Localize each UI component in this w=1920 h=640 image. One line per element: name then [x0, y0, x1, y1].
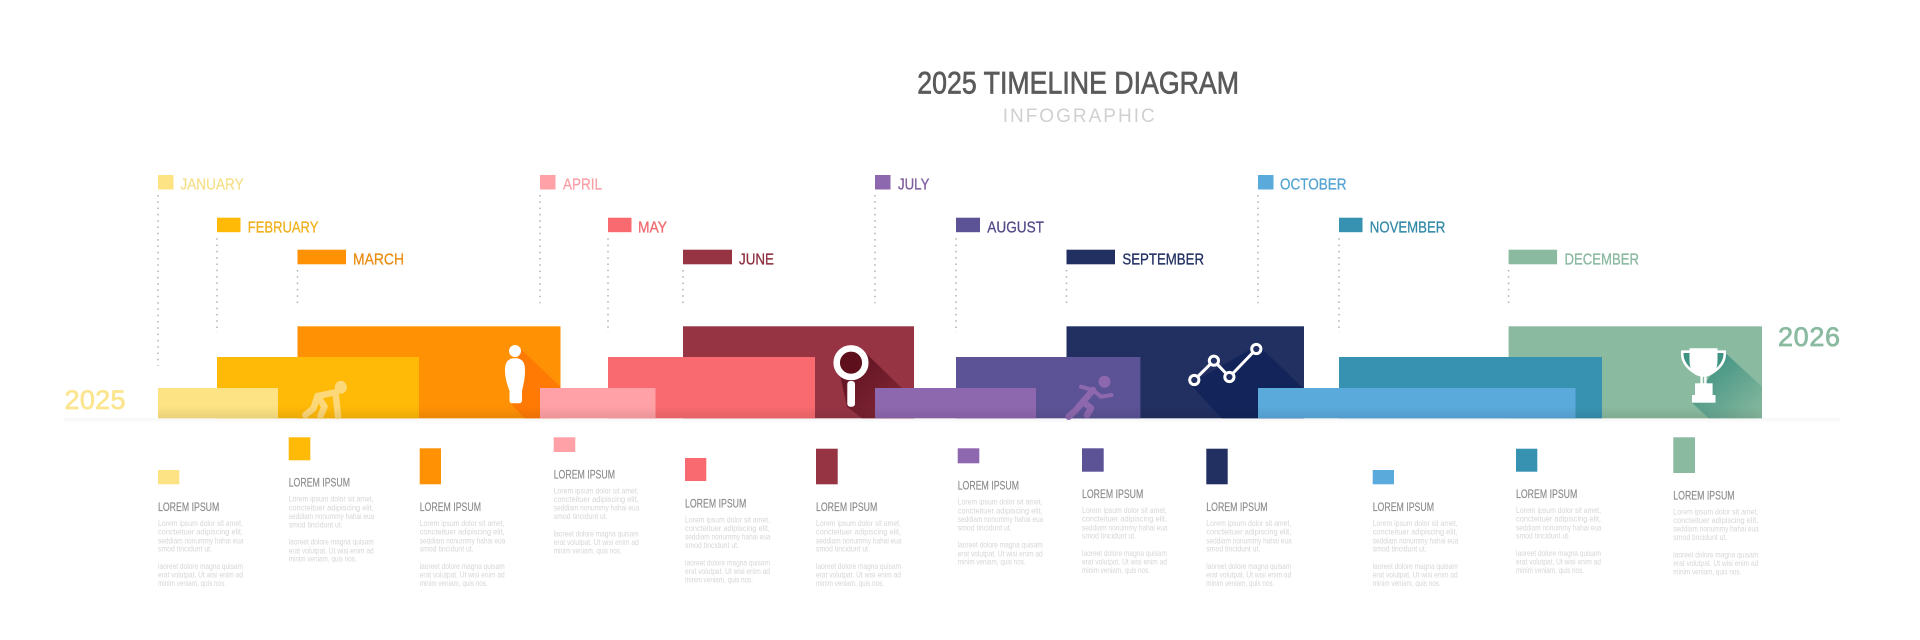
note: March: LOREM IPSUM: [420, 502, 481, 514]
note: December: concteituer adipiscing elit,: [1673, 515, 1758, 525]
note: July: [958, 448, 1043, 567]
note: August: [1082, 448, 1168, 575]
note: March: seddiam nonummy hahai eua: [420, 535, 505, 545]
note: June: Lorem ipsum dolor sit amet,: [816, 518, 901, 528]
icon: crawling figure: [305, 381, 347, 416]
note: July: minim veniam, quis nos.: [958, 557, 1026, 567]
note: August: seddiam nonummy hahai eua: [1082, 522, 1168, 532]
note: June: seddiam nonummy hahai eua: [816, 535, 902, 545]
bar: April: [540, 388, 656, 418]
icon: trophy: [1682, 348, 1725, 403]
bar: September with line-chart icon: [1066, 326, 1304, 418]
note: October: LOREM IPSUM: [1373, 502, 1434, 514]
note: August: concteituer adipiscing elit,: [1082, 514, 1167, 524]
note: April: seddiam nonummy hahai eua: [554, 503, 639, 513]
note: August: Lorem ipsum dolor sit amet,: [1082, 505, 1167, 515]
note: March: [420, 448, 505, 588]
note: May: concteituer adipiscing elit,: [685, 523, 770, 533]
note: September: LOREM IPSUM: [1206, 502, 1268, 514]
note: May: LOREM IPSUM: [685, 498, 746, 510]
month flag: April: [540, 175, 602, 303]
month flag: May: MAY: [638, 220, 667, 236]
note: May: smod tincidunt ut.: [685, 540, 739, 550]
bar: March with person icon: [298, 326, 560, 418]
note: December: [1673, 437, 1759, 576]
note: July: laoreet dolore magna quisam: [958, 540, 1043, 550]
note: April: erat volutpat. Ut wisi enim ad: [554, 537, 639, 547]
note: October: concteituer adipiscing elit,: [1373, 527, 1458, 537]
note: November: smod tincidunt ut.: [1516, 531, 1570, 541]
note: June: minim veniam, quis nos.: [816, 578, 884, 588]
note: July: Lorem ipsum dolor sit amet,: [958, 497, 1043, 507]
month flag: June: JUNE: [739, 252, 774, 268]
note: April: Lorem ipsum dolor sit amet,: [554, 485, 639, 495]
note: October: minim veniam, quis nos.: [1373, 578, 1441, 588]
note: December: smod tincidunt ut.: [1673, 532, 1727, 542]
month flag: February: [217, 218, 319, 333]
note: February: LOREM IPSUM: [289, 478, 350, 490]
note: September: minim veniam, quis nos.: [1206, 578, 1274, 588]
note: September: Lorem ipsum dolor sit amet,: [1206, 518, 1291, 528]
bar: July: [875, 388, 1036, 418]
month flag: July: [875, 175, 930, 303]
note: February: seddiam nonummy hahai eua: [289, 511, 374, 521]
month flag: April: APRIL: [563, 176, 602, 194]
note: September: smod tincidunt ut.: [1206, 544, 1260, 554]
note: August: laoreet dolore magna quisam: [1082, 548, 1167, 558]
note: May: seddiam nonummy hahai eua: [685, 532, 771, 542]
note: October: laoreet dolore magna quisam: [1373, 561, 1458, 571]
note: June: erat volutpat. Ut wisi enim ad: [816, 570, 901, 580]
note: December: laoreet dolore magna quisam: [1673, 549, 1758, 559]
note: November: erat volutpat. Ut wisi enim ad: [1516, 557, 1601, 567]
note: December: seddiam nonummy hahai eua: [1673, 524, 1759, 534]
note: June: concteituer adipiscing elit,: [816, 527, 901, 537]
note: December: erat volutpat. Ut wisi enim ad: [1673, 558, 1759, 568]
icon: line chart: [1190, 344, 1261, 385]
note: October: smod tincidunt ut.: [1373, 544, 1427, 554]
note: March: laoreet dolore magna quisam: [420, 561, 505, 571]
note: June: laoreet dolore magna quisam: [816, 561, 901, 571]
icon: running figure: [1069, 376, 1112, 417]
note: May: minim veniam, quis nos.: [685, 574, 753, 584]
note: January: seddiam nonummy hahai eua: [158, 535, 244, 545]
note: November: seddiam nonummy hahai eua: [1516, 522, 1602, 532]
month flag: August: AUGUST: [987, 220, 1044, 236]
icon: standing person: [505, 345, 525, 403]
note: February: erat volutpat. Ut wisi enim ad: [289, 545, 374, 555]
note: March: concteituer adipiscing elit,: [420, 527, 505, 537]
month flag: September: SEPTEMBER: [1122, 252, 1204, 268]
month flag: October: OCTOBER: [1280, 176, 1346, 194]
note: November: Lorem ipsum dolor sit amet,: [1516, 505, 1601, 515]
note: October: [1373, 470, 1458, 588]
month flag: November: NOVEMBER: [1370, 220, 1445, 236]
month flag: December: [1509, 250, 1639, 303]
note: May: erat volutpat. Ut wisi enim ad: [685, 566, 770, 576]
month flag: December: DECEMBER: [1564, 252, 1639, 268]
note: July: LOREM IPSUM: [958, 481, 1019, 493]
bar: October: [1258, 388, 1576, 418]
note: June: LOREM IPSUM: [816, 502, 877, 514]
note: April: minim veniam, quis nos.: [554, 545, 622, 555]
month flag: March: [298, 250, 404, 303]
note: February: concteituer adipiscing elit,: [289, 502, 374, 512]
note: February: minim veniam, quis nos.: [289, 554, 357, 564]
note: October: Lorem ipsum dolor sit amet,: [1373, 518, 1458, 528]
note: January: erat volutpat. Ut wisi enim ad: [158, 570, 243, 580]
month flag: August: [956, 218, 1044, 333]
month flag: October: [1258, 175, 1346, 303]
month flag: September: [1066, 250, 1204, 303]
note: January: LOREM IPSUM: [158, 502, 219, 514]
note: January: minim veniam, quis nos.: [158, 578, 226, 588]
note: October: erat volutpat. Ut wisi enim ad: [1373, 570, 1458, 580]
month flag: May: [608, 218, 667, 333]
note: June: [816, 449, 902, 588]
note: November: laoreet dolore magna quisam: [1516, 548, 1601, 558]
note: November: LOREM IPSUM: [1516, 489, 1577, 501]
note: September: seddiam nonummy hahai eua: [1206, 535, 1292, 545]
note: March: erat volutpat. Ut wisi enim ad: [420, 570, 505, 580]
note: March: smod tincidunt ut.: [420, 544, 474, 554]
note: July: seddiam nonummy hahai eua: [958, 514, 1043, 524]
note: April: laoreet dolore magna quisam: [554, 528, 639, 538]
month flag: July: JULY: [898, 176, 930, 194]
bar: December with trophy: [1509, 326, 1762, 418]
note: December: LOREM IPSUM: [1673, 490, 1735, 502]
note: June: smod tincidunt ut.: [816, 544, 870, 554]
bar: January: [158, 388, 278, 418]
note: September: concteituer adipiscing elit,: [1206, 527, 1291, 537]
note: August: erat volutpat. Ut wisi enim ad: [1082, 557, 1167, 567]
note: February: smod tincidunt ut.: [289, 519, 343, 529]
note: November: concteituer adipiscing elit,: [1516, 514, 1601, 524]
note: September: laoreet dolore magna quisam: [1206, 561, 1291, 571]
note: January: smod tincidunt ut.: [158, 544, 212, 554]
bar: June with magnifier: [683, 326, 914, 418]
note: January: concteituer adipiscing elit,: [158, 527, 243, 537]
bar: May: [608, 357, 815, 418]
subtitle: INFOGRAPHIC: [1003, 106, 1155, 127]
icon: magnifying glass: [837, 348, 865, 407]
note: August: smod tincidunt ut.: [1082, 531, 1136, 541]
note: July: erat volutpat. Ut wisi enim ad: [958, 548, 1043, 558]
note: May: Lorem ipsum dolor sit amet,: [685, 514, 770, 524]
note: April: LOREM IPSUM: [554, 469, 615, 481]
bar: August with runner: [956, 357, 1140, 418]
month flag: January: JANUARY: [180, 176, 244, 194]
note: July: smod tincidunt ut.: [958, 522, 1012, 532]
month flag: February: FEBRUARY: [248, 220, 319, 236]
note: April: smod tincidunt ut.: [554, 511, 608, 521]
month flag: March: MARCH: [353, 252, 404, 268]
note: January: laoreet dolore magna quisam: [158, 561, 243, 571]
note: December: Lorem ipsum dolor sit amet,: [1673, 506, 1758, 516]
note: July: concteituer adipiscing elit,: [958, 505, 1043, 515]
note: January: Lorem ipsum dolor sit amet,: [158, 518, 243, 528]
bar: February with crawling figure: [217, 357, 419, 418]
note: February: laoreet dolore magna quisam: [289, 537, 374, 547]
note: March: minim veniam, quis nos.: [420, 578, 488, 588]
note: January: [158, 470, 244, 588]
note: March: Lorem ipsum dolor sit amet,: [420, 518, 505, 528]
note: May: [685, 458, 771, 584]
month flag: January: [158, 175, 244, 366]
note: September: erat volutpat. Ut wisi enim ad: [1206, 570, 1292, 580]
note: February: [289, 437, 374, 564]
year label: 2026: 2026: [1778, 322, 1840, 352]
title: 2025 TIMELINE DIAGRAM: [917, 64, 1239, 100]
note: November: [1516, 449, 1602, 575]
year label: 2025: 2025: [64, 385, 126, 415]
note: April: [554, 437, 639, 555]
month flag: June: [683, 250, 774, 303]
note: February: Lorem ipsum dolor sit amet,: [289, 494, 374, 504]
note: May: laoreet dolore magna quisam: [685, 557, 770, 567]
note: November: minim veniam, quis nos.: [1516, 565, 1584, 575]
note: April: concteituer adipiscing elit,: [554, 494, 639, 504]
note: August: LOREM IPSUM: [1082, 489, 1143, 501]
note: October: seddiam nonummy hahai eua: [1373, 535, 1458, 545]
note: September: [1206, 449, 1292, 588]
bar: November: [1339, 357, 1602, 418]
note: December: minim veniam, quis nos.: [1673, 566, 1741, 576]
note: August: minim veniam, quis nos.: [1082, 565, 1150, 575]
month flag: November: [1339, 218, 1445, 333]
